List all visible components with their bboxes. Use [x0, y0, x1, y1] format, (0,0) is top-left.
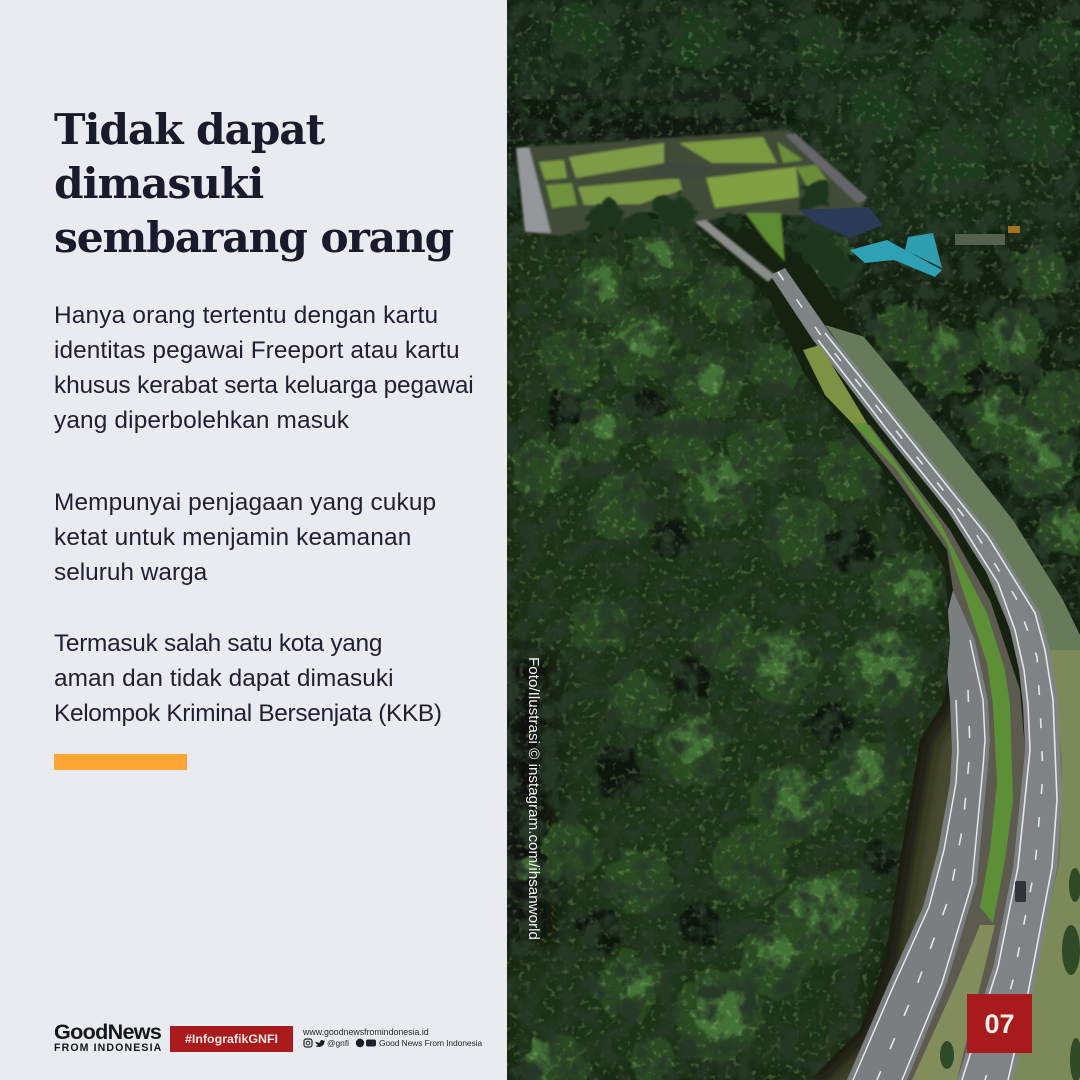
text block: access	[54, 302, 474, 434]
park lawns and paths	[516, 130, 868, 282]
text block: safety	[54, 630, 442, 727]
text block: access: khusus kerabat serta keluarga pegawai	[54, 372, 474, 399]
road: right carriageway	[770, 268, 1062, 1080]
page number: 07	[984, 1009, 1015, 1039]
text block: access: yang diperbolehkan masuk	[54, 407, 349, 434]
social contacts: Good News From Indonesia	[379, 1038, 482, 1048]
text block: security	[54, 489, 436, 586]
text block: safety: Termasuk salah satu kota yang	[54, 630, 382, 657]
median base	[852, 423, 1025, 1080]
hashtag badge	[170, 1026, 293, 1052]
accent bar	[54, 754, 187, 770]
page number	[967, 994, 1032, 1053]
hashtag badge: #InfografikGNFI	[185, 1032, 278, 1046]
teal roof building	[799, 207, 1020, 277]
social contacts: www.goodnewsfromindonesia.id	[303, 1027, 429, 1037]
title: sembarang orang	[54, 212, 453, 262]
text block: security: seluruh warga	[54, 559, 207, 586]
vehicle	[1015, 881, 1026, 902]
green median	[852, 423, 1013, 923]
title: Tidak dapat	[54, 104, 324, 154]
logo: GoodNews From Indonesia: GoodNews	[54, 1019, 161, 1044]
forest canopy	[507, 0, 1080, 1080]
text block: safety: aman dan tidak dapat dimasuki	[54, 665, 394, 692]
text block: safety: Kelompok Kriminal Bersenjata (KKB)	[54, 700, 442, 727]
forest floor shadow	[810, 640, 950, 1080]
roadside shrubs	[940, 868, 1080, 1080]
logo: GoodNews From Indonesia: FROM INDONESIA	[54, 1042, 162, 1054]
park trees	[589, 180, 855, 288]
text block: access: Hanya orang tertentu dengan kartu	[54, 302, 438, 329]
photo: aerial view of forest and curved road	[507, 0, 1080, 1080]
photo credit: Foto/Ilustrasi © instagram.com/ihsanworld	[525, 657, 542, 940]
road markings	[778, 272, 1057, 1080]
icons: social media	[303, 1038, 376, 1048]
shaded ground left of left road	[780, 620, 955, 1080]
right verge	[825, 325, 1080, 1080]
road: left carriageway	[847, 590, 990, 1080]
text block: security: Mempunyai penjagaan yang cukup	[54, 489, 436, 516]
social contacts	[303, 1027, 482, 1048]
title: dimasuki	[54, 158, 263, 208]
social contacts: @gnfi	[327, 1038, 349, 1048]
title	[54, 104, 454, 262]
text block: access: identitas pegawai Freeport atau kartu	[54, 337, 460, 364]
text block: security: ketat untuk menjamin keamanan	[54, 524, 411, 551]
